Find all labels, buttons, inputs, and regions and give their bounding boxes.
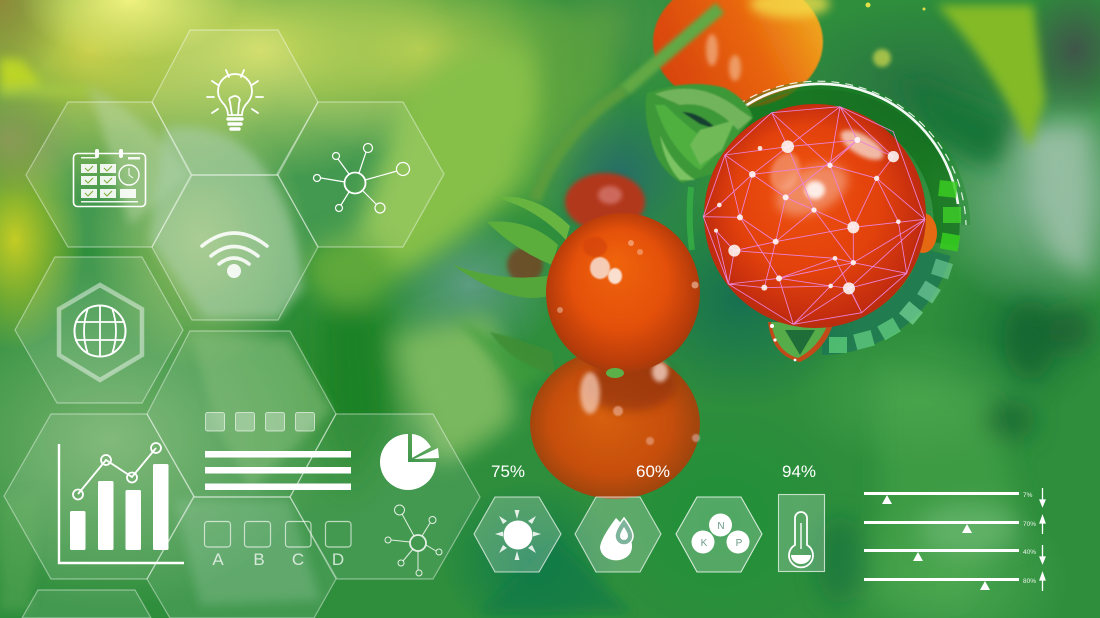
icon: nutrient circles: K: [701, 538, 708, 549]
icon: water drops: [600, 518, 633, 560]
A B C D option boxes: C: [292, 550, 304, 569]
text lines block: [205, 451, 351, 490]
slider gauges: [864, 488, 1045, 591]
stat: water 60%: 60%: [636, 462, 670, 481]
A B C D option boxes: A: [212, 550, 224, 569]
icon: pie chart: [380, 434, 439, 490]
icon: light bulb: [207, 70, 263, 129]
slider 40% down: [864, 545, 1045, 563]
hexagon panel grid: [4, 30, 480, 618]
A B C D option boxes: [204, 522, 351, 569]
stem and sepals: [453, 90, 645, 375]
slider 70% up: [864, 516, 1045, 534]
stat: water 60%: [575, 462, 670, 572]
stat: sunlight 75%: [474, 462, 561, 572]
slider 7% down: [864, 488, 1045, 506]
icon: globe in hexagon: [59, 285, 142, 380]
wireframe mesh over big tomato: [703, 107, 925, 324]
stat: sunlight 75%: 75%: [491, 462, 525, 481]
icon: nutrient circles: [692, 514, 750, 554]
icon: sun: [495, 510, 541, 560]
progress ring around big tomato: [690, 2, 966, 353]
big tomato: [704, 104, 937, 328]
stat: N K P nutrients: [676, 497, 762, 572]
calyx of big tomato: [646, 84, 753, 183]
slider 80% up: [864, 573, 1045, 591]
icon: network: [314, 144, 410, 213]
tomato: lower: [530, 349, 700, 499]
stat: temperature 94%: 94%: [782, 462, 816, 481]
icon: nutrient circles: P: [736, 538, 743, 549]
A B C D option boxes: D: [332, 550, 344, 569]
icon: wifi: [202, 233, 267, 278]
slider 70% up: 70%: [1023, 521, 1036, 528]
bar and line chart icon: [59, 443, 184, 563]
A B C D option boxes: B: [253, 550, 265, 569]
icon: small network: [385, 505, 442, 576]
slider 80% up: 80%: [1023, 578, 1036, 585]
slider 40% down: 40%: [1023, 549, 1036, 556]
icon: thermometer: [789, 512, 813, 567]
tomato: middle with droplets: [546, 213, 700, 378]
ring tick squares: [829, 180, 961, 353]
icon: calendar with clock: [74, 149, 146, 206]
water drop under big tomato: [768, 322, 833, 362]
glow spots: [866, 2, 926, 67]
icon row: small squares: [206, 412, 314, 431]
stat: temperature 94%: [778, 462, 824, 572]
slider 7% down: 7%: [1023, 492, 1033, 499]
mesh nodes: [714, 137, 901, 294]
tomato: upper background: [625, 0, 830, 108]
icon: nutrient circles: N: [717, 521, 725, 532]
